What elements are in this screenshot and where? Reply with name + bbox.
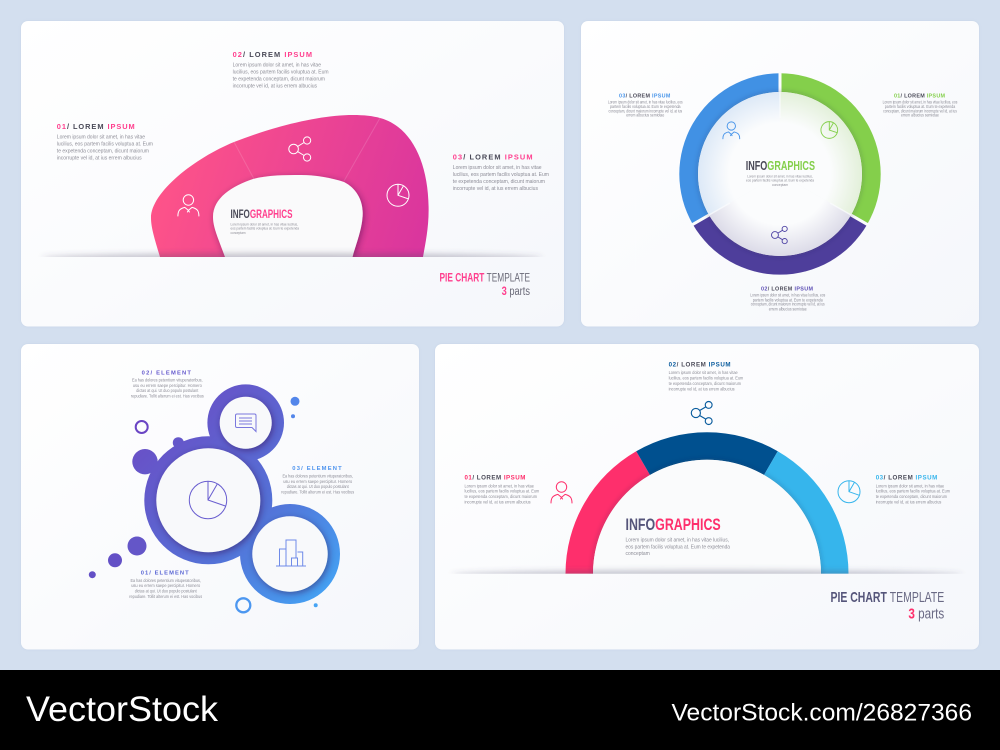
text block 03: errem albucius semiotae — [626, 113, 665, 118]
text block 02: te expetenda conceptam, dicunt maiorum — [669, 381, 741, 386]
center title: eos partem facilis voluptua at. Eum te expetenda — [230, 227, 299, 231]
text block 01: incorrupte vel id, at ius errem albucius — [464, 499, 531, 504]
text block 02: incorrupte vel id, at ius errem albucius — [233, 84, 317, 90]
icon: share — [289, 137, 311, 161]
panel: pink blob pie chart — [21, 21, 564, 326]
text block 02: conceptam, dicunt maiorum incorrupte vel id, at ius — [751, 302, 825, 307]
text block 01: incorrupte vel id, at ius errem albucius — [57, 155, 142, 161]
icon: person — [551, 482, 572, 503]
text block 02: lucilius, eos partem facilis voluptua at. Eum — [233, 70, 329, 76]
center title: INFOGRAPHICS — [626, 515, 721, 534]
decorative dots — [89, 397, 318, 612]
icon: pie — [189, 481, 227, 519]
text block 02: 02/ LOREM IPSUM — [761, 287, 814, 293]
text block 03: 03/ ELEMENT — [292, 466, 342, 472]
center title: Lorem ipsum dolor sit amet, in has vitae lucilius, — [230, 222, 298, 226]
text block 01: 01/ LOREM IPSUM — [894, 94, 946, 100]
icon: pie — [838, 481, 860, 503]
template label: PIE CHART TEMPLATE — [830, 589, 944, 606]
text block 01 — [57, 122, 153, 161]
text block 02: errem albucius semiotae — [769, 306, 807, 311]
text block 02: incorrupte vel id, at ius errem albucius — [669, 386, 735, 391]
text block 01: te expetenda conceptam, dicunt maiorum — [464, 494, 537, 499]
icon: person — [178, 195, 199, 216]
text block 03: lucilius, eos partem facilis voluptua at. Eum — [876, 489, 950, 494]
template label — [440, 273, 530, 298]
text block 02 — [669, 362, 743, 391]
text block 03: Ea has dolores petentium vituperatoribus, — [282, 474, 353, 479]
template label: PIE CHART TEMPLATE — [440, 273, 530, 285]
white discs — [156, 397, 328, 592]
text block 03: incorrupte vel id, at ius errem albucius — [453, 186, 538, 192]
text block 02: lucilius, eos partem facilis voluptua at. Eum — [669, 375, 743, 380]
icon: person — [723, 122, 740, 139]
text block 03: te expetenda conceptam, dicunt maiorum — [876, 494, 947, 499]
template label: 3 parts — [908, 605, 944, 622]
text block 03: usu eu errem saepe percipitur. Homero — [283, 479, 353, 484]
text block 03: lucilius, eos partem facilis voluptua at. Eum — [453, 172, 549, 178]
text block 01: lucilius, eos partem facilis voluptua at. Eum — [57, 141, 153, 147]
footer id: VectorStock.com/26827366 — [672, 700, 972, 726]
text block 03: dictas at qui. Ut duo populo postulant — [287, 484, 349, 489]
template label — [830, 589, 944, 622]
icon: share — [691, 402, 712, 424]
text block 01: conceptam, dicunt maiorum incorrupte vel id, at ius — [883, 108, 957, 113]
ring segments — [679, 72, 881, 275]
center title: eos partem facilis voluptua at. Eum te expetenda — [746, 179, 815, 183]
text block 03 — [281, 466, 355, 494]
text block 02: Ea has dolores petentium vituperatoribus, — [132, 378, 203, 383]
center title — [626, 515, 730, 557]
center title: Lorem ipsum dolor sit amet, in has vitae lucilius, — [626, 538, 729, 544]
text block 01: Lorem ipsum dolor sit amet, in has vitae lucilius, eos — [883, 99, 958, 104]
text block 02: Lorem ipsum dolor sit amet, in has vitae lucilius, eos — [750, 293, 826, 298]
text block 03 — [876, 475, 950, 504]
footer bar — [0, 670, 1000, 750]
half ring segments — [455, 432, 959, 574]
text block 03: 03/ LOREM IPSUM — [876, 475, 937, 482]
center title: conceptam — [772, 183, 788, 187]
footer brand: VectorStock — [26, 690, 219, 729]
text block 02: 02/ ELEMENT — [142, 371, 191, 377]
text block 01: errem albucius semiotae — [901, 113, 939, 118]
text block 02: te expetenda conceptam, dicunt maiorum — [233, 77, 325, 83]
center title: INFOGRAPHICS — [746, 158, 815, 173]
text block 01: Lorem ipsum dolor sit amet, in has vitae — [464, 483, 534, 488]
icon: pie — [821, 122, 838, 138]
text block 03 — [453, 153, 549, 192]
text block 03: Lorem ipsum dolor sit amet, in has vitae lucilius, eos — [608, 99, 683, 104]
text block 03: Lorem ipsum dolor sit amet, in has vitae — [453, 165, 542, 171]
panel: half ring pie chart — [435, 344, 979, 650]
text block 01 — [464, 475, 539, 504]
text block 03: incorrupte vel id, at ius errem albucius — [876, 499, 942, 504]
inner disc — [698, 92, 862, 256]
text block 03: Lorem ipsum dolor sit amet, in has vitae — [876, 483, 945, 488]
text block 03: repudiare. Tollit alterum ei est. Has vocibus — [281, 490, 355, 494]
text block 03: 03/ LOREM IPSUM — [453, 153, 532, 162]
center title — [230, 209, 299, 235]
text block 03 — [608, 94, 683, 118]
pink blob chart — [42, 115, 542, 263]
text block 02: Lorem ipsum dolor sit amet, in has vitae — [669, 370, 738, 375]
center title: conceptam — [230, 231, 246, 235]
text block 01: Ea has dolores petentium vituperatoribus, — [130, 578, 201, 583]
text block 02 — [131, 371, 204, 398]
text block 01: usu eu errem saepe percipitur. Homero — [131, 583, 201, 588]
icon: pie — [387, 184, 409, 206]
text block 02: Lorem ipsum dolor sit amet, in has vitae — [233, 63, 321, 69]
center title: Lorem ipsum dolor sit amet, in has vitae lucilius, — [747, 174, 813, 178]
template label: 3 parts — [502, 286, 530, 298]
text block 03: conceptam, dicunt maiorum incorrupte vel id, at ius — [608, 108, 683, 113]
text block 02: partem facilis voluptua at. Eum te expetenda — [753, 297, 823, 302]
text block 03: 03/ LOREM IPSUM — [619, 94, 671, 100]
panel: circular pie chart — [581, 21, 979, 326]
icon: share — [772, 226, 787, 244]
text block 01 — [129, 571, 203, 599]
connected rings — [132, 384, 340, 604]
text block 01: 01/ LOREM IPSUM — [464, 475, 525, 482]
text block 01: repudiare. Tollit alterum ei est. Has vocibus — [129, 594, 203, 599]
text block 02: repudiare. Tollit alterum ei est. Has vocibus — [131, 394, 204, 398]
text block 02: 02/ LOREM IPSUM — [233, 50, 312, 59]
center title: eos partem facilis voluptua at. Eum te expetenda — [626, 544, 730, 550]
text block 01 — [883, 94, 958, 118]
text block 01: lucilius, eos partem facilis voluptua at. Eum — [464, 489, 539, 494]
text block 03: te expetenda conceptam, dicunt maiorum — [453, 179, 545, 185]
text block 02 — [233, 50, 329, 90]
text block 01: partem facilis voluptua at. Eum te expetenda — [885, 104, 956, 109]
text block 01: Lorem ipsum dolor sit amet, in has vitae — [57, 134, 145, 140]
text block 01: dictas at qui. Ut duo populo postulant — [135, 588, 197, 593]
panel: connected circles — [21, 344, 419, 650]
text block 01: 01/ LOREM IPSUM — [57, 122, 135, 131]
text block 01: te expetenda conceptam, dicunt maiorum — [57, 148, 149, 154]
center title: conceptam — [626, 551, 650, 557]
center title — [746, 158, 815, 187]
text block 02: 02/ LOREM IPSUM — [669, 362, 730, 369]
text block 03: partem facilis voluptua at. Eum te expetenda — [610, 104, 681, 109]
text block 02 — [750, 287, 826, 311]
icon: buildings — [276, 540, 306, 566]
text block 02: usu eu errem saepe percipitur. Homero — [133, 383, 202, 388]
icon: chat bubble — [236, 414, 256, 432]
text block 02: dictas at qui. Ut duo populo postulant — [136, 388, 199, 393]
center title: INFOGRAPHICS — [230, 209, 293, 221]
text block 01: 01/ ELEMENT — [141, 571, 189, 577]
